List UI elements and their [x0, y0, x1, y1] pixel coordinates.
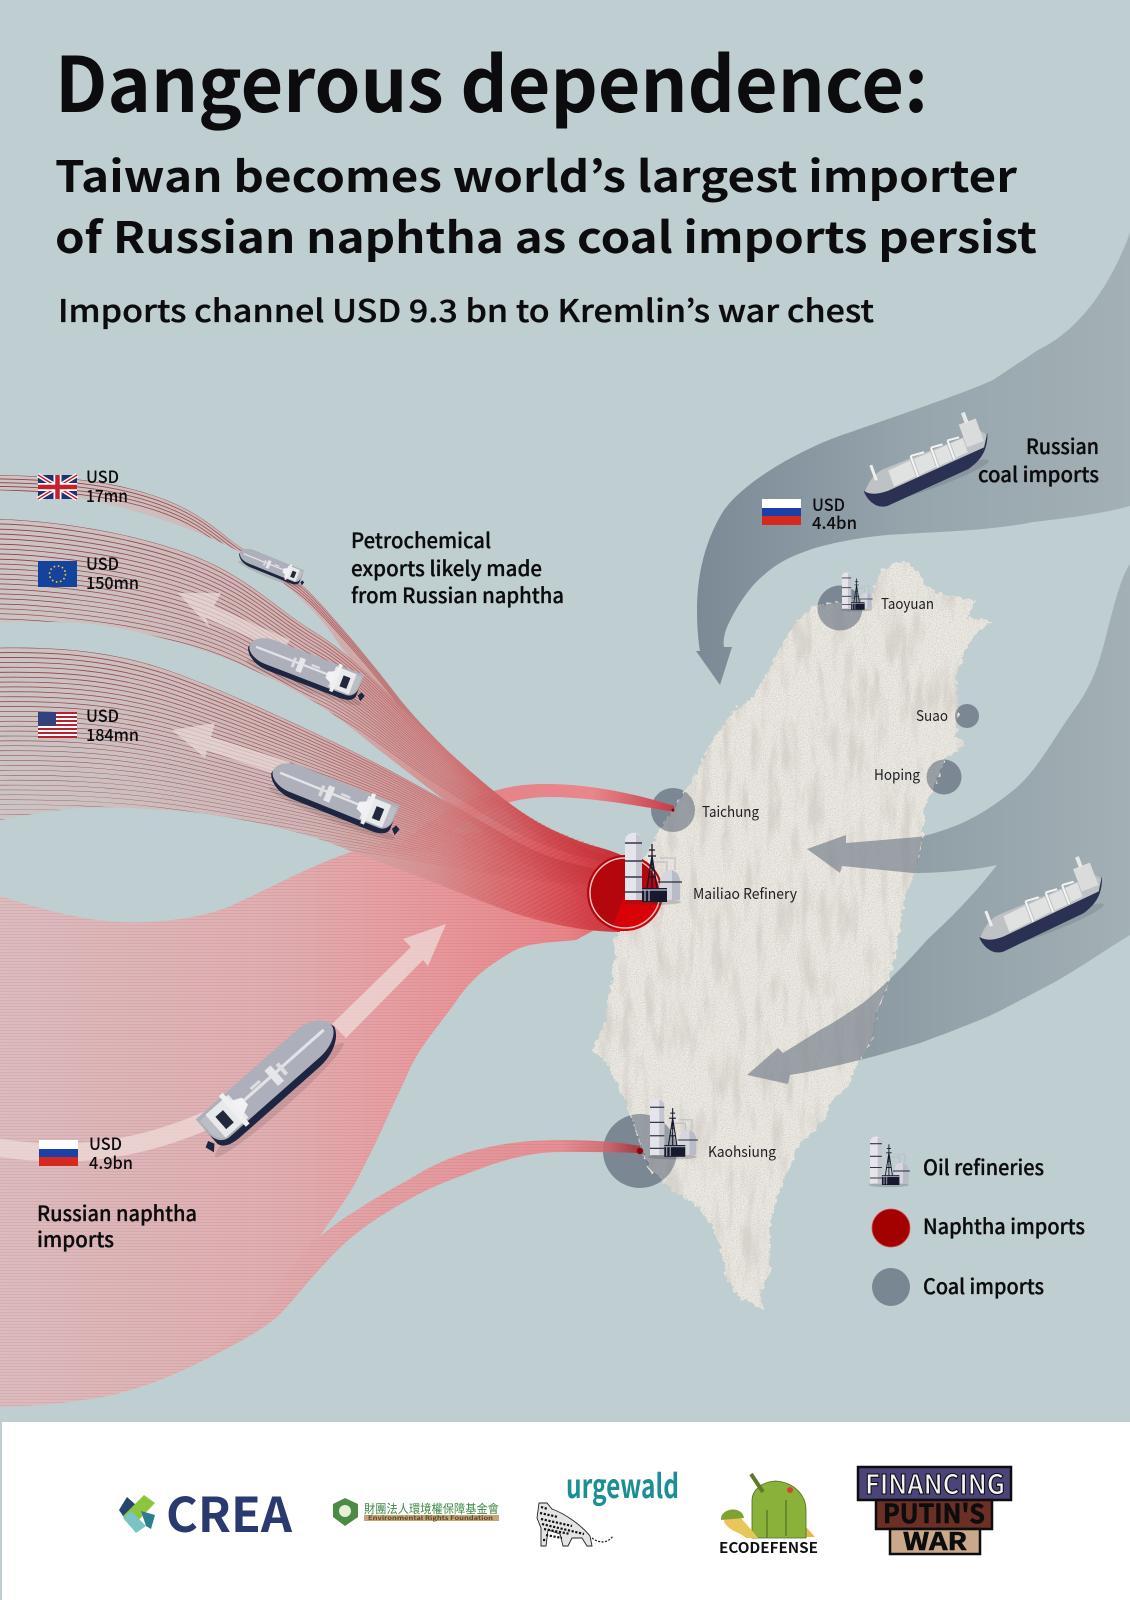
- arrow: US exports: [172, 723, 290, 778]
- ship: EU tanker: [241, 631, 372, 711]
- labels: ports: Hoping: [874, 764, 920, 785]
- text: Russian naphtha imports: Russian naphtha: [37, 1198, 197, 1228]
- export flow: US: [0, 648, 625, 932]
- logo: Financing Putin's War: PUTIN'S: [883, 1494, 985, 1531]
- ship: UK tanker: [235, 545, 309, 591]
- ship: naphtha tanker: [186, 1008, 353, 1164]
- naphtha flow to Mailiao: [0, 833, 625, 1407]
- logo: urgewald: [537, 1460, 679, 1546]
- labels: ports: Kaohsiung: [708, 1141, 776, 1162]
- text: Russian coal imports: [978, 431, 1099, 489]
- text: petrochemical exports: from Russian naphtha: [351, 580, 564, 610]
- hatch texture at convergence: [482, 806, 600, 920]
- label: naphtha value: [89, 1130, 133, 1174]
- coal flow north: [696, 233, 1130, 685]
- text: Russian coal imports: Russian: [1026, 431, 1099, 461]
- label: UK value: USD: [86, 463, 119, 488]
- labels: ports: [693, 593, 948, 1162]
- naphtha flow to Taichung: [390, 784, 674, 852]
- logo: CREA: CREA: [166, 1476, 292, 1546]
- logo: Environmental Rights Foundation: 財團法人環境權保障基金會: [364, 1501, 499, 1516]
- flag: EU: [38, 561, 77, 587]
- strapline: Imports channel USD 9.3 bn to Kremlin’s war chest: [58, 286, 874, 331]
- subtitle line 1: Taiwan becomes world’s largest importer: [55, 143, 1017, 205]
- legend swatch: naphtha: [872, 1209, 910, 1247]
- label: UK value: [86, 463, 128, 507]
- label: EU value: 150mn: [86, 569, 139, 594]
- label: naphtha value: 4.9bn: [89, 1149, 133, 1174]
- label: EU value: [86, 550, 139, 594]
- logo: Financing Putin's War: WAR: [903, 1522, 967, 1557]
- coal flow east and south: [747, 564, 1130, 1084]
- arrow: EU exports: [178, 593, 290, 652]
- legend swatch: coal: [872, 1268, 910, 1306]
- logo: Environmental Rights Foundation: Environmental Rights Foundation: [368, 1514, 494, 1522]
- ship: coal carrier north: [850, 407, 999, 512]
- ship: coal carrier east: [965, 851, 1114, 958]
- flag: US: [38, 712, 77, 738]
- logo: Financing Putin's War: [858, 1463, 1011, 1557]
- coal port circles: [603, 586, 979, 1188]
- logo: Ecodefense: [719, 1474, 818, 1558]
- labels: ports: Mailiao Refinery: [693, 883, 797, 904]
- export flow: EU: [0, 519, 622, 869]
- label: UK value: 17mn: [86, 482, 128, 507]
- logo: Financing Putin's War: FINANCING: [865, 1463, 1005, 1502]
- label: US value: [86, 702, 139, 746]
- naphtha flow to Kaohsiung: [204, 1140, 640, 1360]
- title: Dangerous dependence:: [55, 24, 928, 134]
- icon: Kaohsiung refinery: [648, 1099, 698, 1159]
- text: Russian naphtha imports: [37, 1198, 197, 1254]
- label: US value: USD: [86, 702, 119, 727]
- legend icon: refinery: [869, 1137, 910, 1187]
- label: EU value: USD: [86, 550, 119, 575]
- flag: UK: [38, 475, 77, 499]
- node: Taichung naphtha: [672, 808, 674, 812]
- arrow: naphtha imports: [0, 924, 446, 1153]
- icon: Taoyuan refinery: [841, 572, 873, 611]
- logo: urgewald: urgewald: [566, 1460, 679, 1508]
- label: naphtha value: USD: [89, 1130, 122, 1155]
- text: Russian naphtha imports: imports: [37, 1224, 114, 1254]
- node: Kaohsiung naphtha: [637, 1148, 643, 1154]
- text: petrochemical exports: Petrochemical: [351, 525, 491, 555]
- ship: US tanker: [263, 755, 408, 846]
- label: coal value: 4.4bn: [812, 509, 857, 534]
- labels: ports: Taoyuan: [881, 593, 934, 614]
- label: coal value: [812, 491, 857, 534]
- legend label: coal: Coal imports: [923, 1271, 1044, 1301]
- subtitle line 2: of Russian naphtha as coal imports persist: [55, 204, 1037, 266]
- text: petrochemical exports: [351, 525, 564, 610]
- text: petrochemical exports: exports likely made: [351, 553, 542, 583]
- label: coal value: USD: [812, 491, 845, 516]
- text: Russian coal imports: coal imports: [978, 459, 1099, 489]
- labels: ports: Suao: [916, 705, 948, 726]
- labels: ports: Taichung: [702, 801, 759, 822]
- flag: Russia naphtha: [39, 1140, 78, 1166]
- icon: Mailiao refinery: [623, 833, 682, 905]
- logo: Environmental Rights Foundation: [333, 1498, 499, 1526]
- flag: Russia coal: [762, 499, 801, 525]
- legend label: naphtha: Naphtha imports: [923, 1211, 1085, 1241]
- footer panel: [2, 1422, 1130, 1600]
- legend label: refineries: Oil refineries: [923, 1152, 1044, 1182]
- node: Mailiao naphtha: [587, 855, 663, 931]
- coal flow over island: [603, 233, 1130, 1188]
- legend: [869, 1137, 1085, 1306]
- logo: Ecodefense: ECODEFENSE: [719, 1537, 818, 1558]
- label: US value: 184mn: [86, 721, 139, 746]
- map: Taiwan: [580, 550, 1000, 1320]
- export flow: UK: [0, 475, 488, 790]
